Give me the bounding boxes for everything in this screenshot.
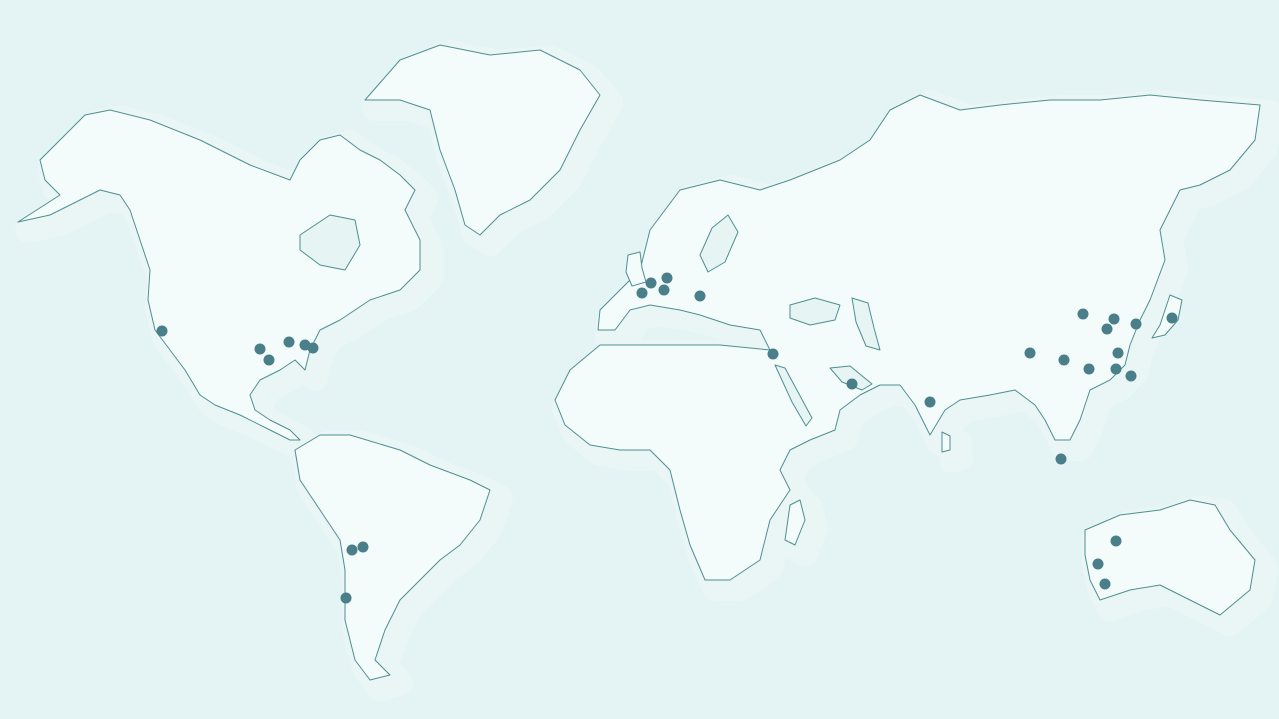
water: caspian sea — [852, 298, 880, 350]
island: sri lanka — [942, 432, 950, 452]
continent: eurasia and africa — [555, 95, 1260, 580]
island: japan — [1152, 295, 1182, 338]
continent: north america — [18, 110, 420, 440]
water: baltic sea — [700, 215, 738, 272]
water: persian gulf — [830, 366, 872, 390]
water: black sea — [790, 298, 840, 325]
water: hudson bay — [300, 215, 360, 270]
continent: south america — [295, 435, 490, 680]
water: red sea — [775, 365, 812, 426]
island: madagascar — [785, 500, 805, 545]
continent: greenland — [365, 45, 600, 235]
location dots — [156, 272, 1178, 604]
continent: australia — [1085, 500, 1255, 615]
island: uk — [626, 252, 646, 286]
